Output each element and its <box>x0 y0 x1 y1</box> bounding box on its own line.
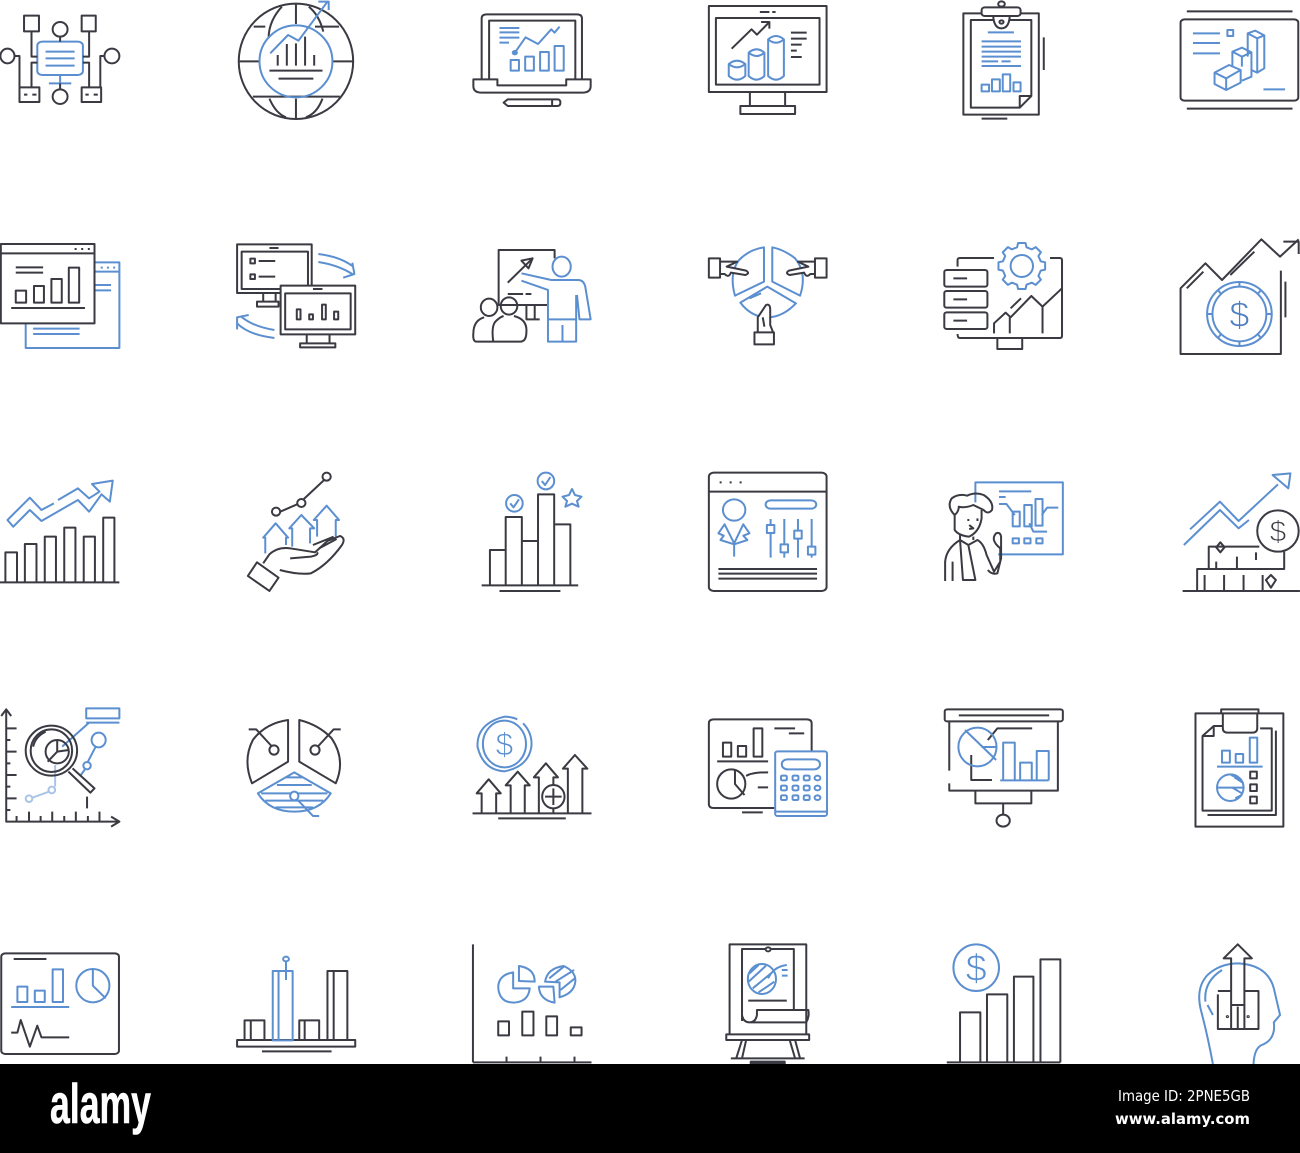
icon: browser windows with bar chart <box>1 244 119 348</box>
icon: projector screen with charts <box>945 709 1063 827</box>
icon: house outline with dollar coin and arrow <box>1181 239 1299 354</box>
icon: clipboard with report <box>963 1 1044 119</box>
icon: desktop monitor with cylinders chart <box>709 6 827 114</box>
website: www.alamy.com <box>1115 1110 1250 1128</box>
icon: dashboard panel with calculator <box>709 719 827 816</box>
icon: profile window with sliders <box>709 473 827 591</box>
icon: axes with pies and bars <box>473 944 591 1062</box>
brand wordmark: alamy <box>50 1072 151 1135</box>
image id: Image ID: 2PNE5GB <box>1118 1087 1250 1105</box>
icon: two monitors syncing <box>237 244 355 347</box>
icon: house outline with dollar coin and arrow: $ <box>1229 294 1249 335</box>
icon: globe with rising chart <box>239 2 353 119</box>
icon: hand holding growth arrows <box>248 473 344 591</box>
icon: dashboard tablet with pulse line <box>1 953 119 1054</box>
icon: rising arrow with coin stacks: $ <box>1270 515 1287 548</box>
footer band <box>0 1064 1300 1153</box>
icon: magnifier over data axes <box>1 708 119 827</box>
icon: dollar coin above growth arrows: $ <box>496 727 514 763</box>
icon: laptop with chart <box>473 14 591 106</box>
icon: network diagram around a screen <box>0 16 119 104</box>
icon: dollar coin with rising bars: $ <box>966 948 987 990</box>
icon: server, gear and chart panel <box>944 243 1062 349</box>
icon: clipboard with chart and checklist <box>1195 709 1283 827</box>
icon: screen with 3D bars <box>1181 11 1298 109</box>
icon: presenter with audience <box>473 250 591 342</box>
icon: businessman presenting a chart <box>945 482 1063 581</box>
icon: bar chart with zigzag arrow <box>0 481 119 582</box>
icon: head with upward arrow and chart <box>1199 944 1280 1064</box>
icon: bars with check badges and star <box>482 473 582 591</box>
icon: hands holding pie slices <box>709 247 827 344</box>
icon: three-slice pie with markers <box>247 720 341 816</box>
icon: rising arrow with coin stacks <box>1183 473 1300 591</box>
icon: flipchart on an easel <box>726 944 809 1064</box>
icon: bars on a platform <box>237 957 355 1051</box>
icon: dollar coin above growth arrows <box>473 717 591 818</box>
icon: dollar coin with rising bars <box>947 944 1060 1062</box>
